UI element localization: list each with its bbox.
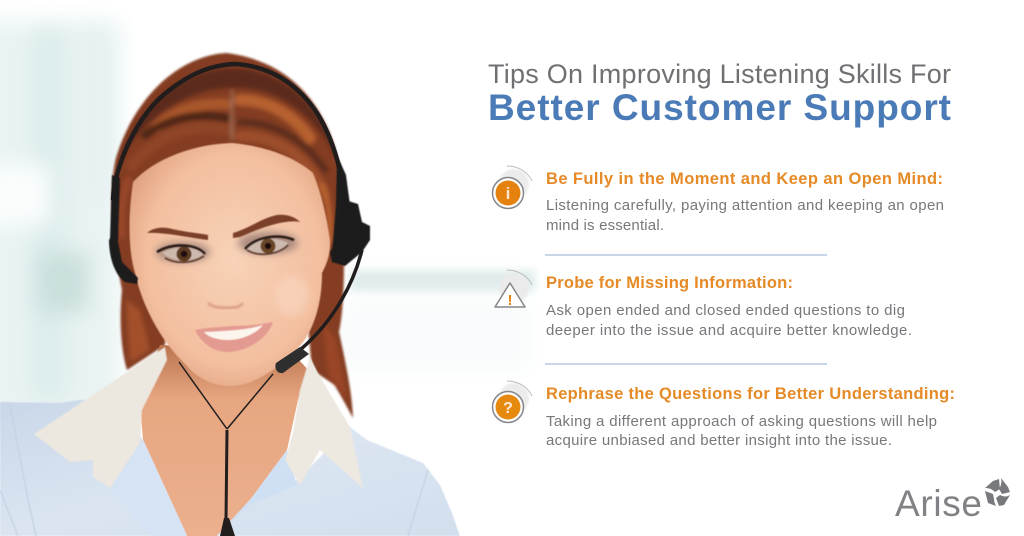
sleeve creases [0, 405, 428, 536]
eye socket shading [156, 242, 210, 262]
icon: question mark [492, 381, 532, 422]
collar left [34, 347, 167, 488]
tip 2: missing information: Probe for Missing Information: [546, 274, 793, 292]
title: Tips On Improving Listening Skills For [488, 59, 951, 89]
logo: Arise [895, 478, 1010, 524]
icon: warning triangle [495, 270, 532, 309]
tip 1: open mind: mind is essential. [546, 217, 664, 234]
right ear cup [330, 200, 370, 266]
icon: information: i [506, 184, 510, 203]
tip 1: open mind: Be Fully in the Moment and Keep an Open Mind: [546, 170, 943, 188]
microphone boom [300, 250, 362, 350]
cheek highlight [275, 276, 309, 316]
icon: information [492, 166, 532, 208]
tip 2: missing information [495, 270, 912, 339]
photo: call-centre agent with headset [0, 53, 460, 536]
face [129, 143, 330, 386]
headband right arm [332, 155, 350, 255]
tip 3: rephrase: Rephrase the Questions for Better Understanding: [546, 385, 955, 403]
shirt placket left [110, 441, 187, 536]
nose shadow [208, 303, 243, 308]
lower hair strands [126, 300, 150, 362]
headband [113, 64, 346, 205]
title [488, 59, 951, 128]
tip 2: missing information: Ask open ended and closed ended questions to dig [546, 302, 905, 319]
hair strands [121, 90, 330, 240]
title: Better Customer Support [488, 87, 951, 128]
neck and chest [140, 345, 310, 536]
icon: question mark: ? [503, 400, 513, 417]
headband left arm [110, 175, 120, 240]
hair top dark under band [118, 68, 336, 165]
tip 3: rephrase: acquire unbiased and better insight into the issue. [546, 432, 892, 449]
tip 1: open mind: Listening carefully, paying attention and keeping an open [546, 197, 944, 214]
icon: swirl [985, 478, 1010, 506]
tip 1: open mind [492, 166, 944, 234]
collar right [285, 357, 363, 488]
cable [179, 362, 273, 429]
logo: Arise: Arise [895, 483, 982, 524]
microphone [275, 347, 309, 373]
eyes [157, 237, 294, 262]
shirt placket right [217, 450, 297, 536]
tip 3: rephrase [492, 381, 955, 449]
shirt body [0, 400, 460, 536]
tip 2: missing information: deeper into the issue and acquire better knowledge. [546, 322, 912, 339]
tip 3: rephrase: Taking a different approach of asking questions will help [546, 413, 937, 430]
icon: warning triangle: ! [508, 292, 512, 309]
mouth [195, 322, 273, 352]
left ear cup [109, 232, 138, 284]
eyebrows [147, 215, 300, 240]
hair back [112, 53, 353, 418]
